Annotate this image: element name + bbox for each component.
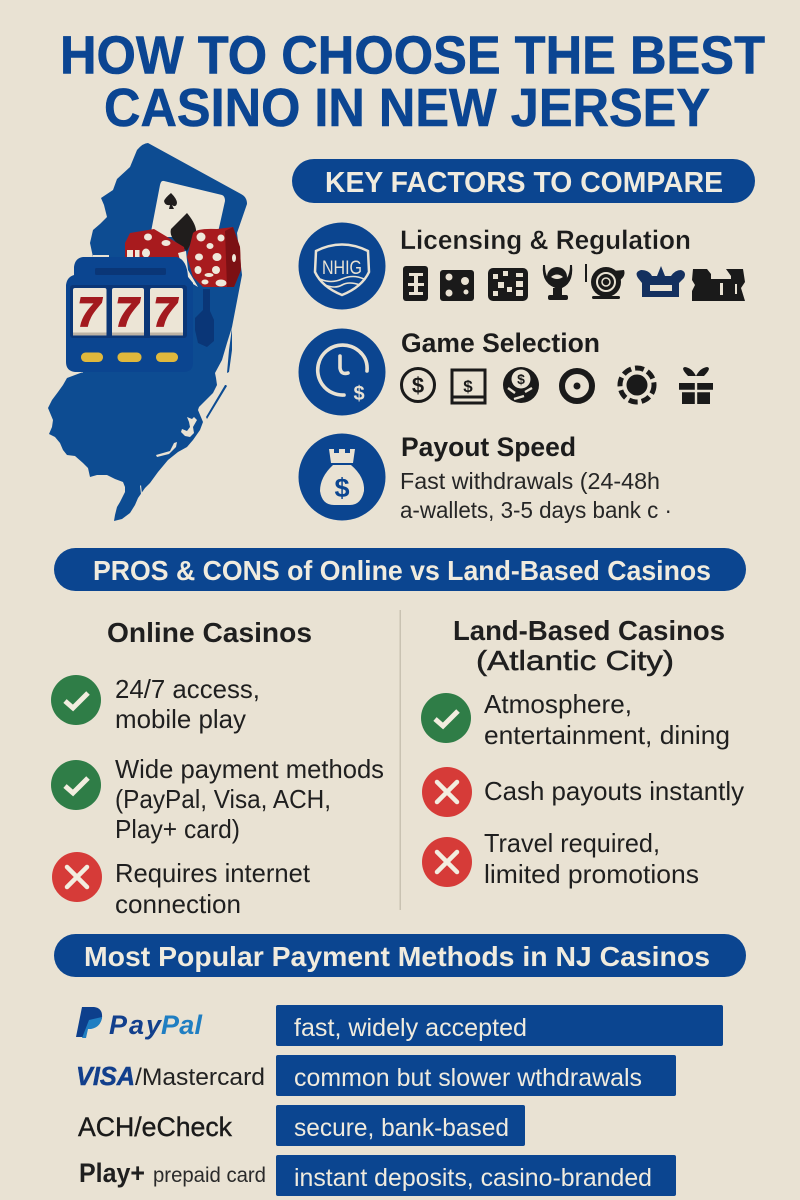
con: cash payouts (422, 767, 744, 817)
panel: online casinos (51, 617, 384, 919)
payment row: Play+ prepaid card: prepaid card (153, 1164, 266, 1187)
map of New Jersey (48, 143, 247, 521)
column heading: Online Casinos (107, 617, 312, 648)
bar (276, 1155, 676, 1196)
red dice (125, 227, 241, 287)
factor: licensing and regulation (298, 222, 745, 310)
payment row: ACH / eCheck: ACH/eCheck (78, 1112, 232, 1142)
heading pill: key factors (292, 159, 755, 203)
reel sevens: 7 (78, 289, 103, 335)
icon: clock with dollar (298, 328, 386, 416)
icon: money bag: $ (334, 473, 350, 503)
title (60, 26, 765, 138)
heading pill: pros and cons (54, 548, 746, 591)
logo: PayPal: Pay (109, 1010, 163, 1040)
con: internet (52, 852, 311, 919)
column heading (453, 615, 725, 676)
description: a-wallets, 3-5 days bank c · (400, 497, 672, 523)
con: travel (422, 828, 699, 889)
payment row: Visa / Mastercard: VISA (76, 1061, 135, 1091)
icon row: game symbols (402, 367, 713, 404)
description (400, 468, 672, 523)
illustration: New Jersey map with casino items (48, 143, 247, 521)
pro: access: mobile play (115, 704, 246, 734)
column heading: Land-Based Casinos (453, 615, 725, 646)
payment row: Play+ prepaid card: Play+ (79, 1158, 145, 1188)
heading pill: pros and cons: PROS & CONS of Online vs Land-Based Casinos (93, 555, 711, 586)
heading pill: key factors: KEY FACTORS TO COMPARE (325, 167, 723, 199)
con: cash payouts: Cash payouts instantly (484, 776, 744, 806)
payment row: Play+ prepaid card: instant deposits, casino-branded (294, 1164, 652, 1192)
factor: payout speed (298, 432, 672, 523)
column heading: (Atlantic City) (476, 645, 674, 676)
payment row: Visa / Mastercard (76, 1055, 676, 1096)
description: Fast withdrawals (24-48h (400, 468, 660, 494)
icon: clock with dollar: $ (353, 383, 365, 405)
icon row: game symbols: $ (517, 371, 525, 387)
con: internet: connection (115, 889, 241, 919)
heading pill: payment methods: Most Popular Payment Methods in NJ Casinos (84, 941, 710, 972)
pro: payment methods (51, 754, 384, 844)
pro: access (51, 674, 260, 734)
reel sevens: 7 (116, 289, 141, 335)
playing card (150, 181, 225, 251)
pro: access: 24/7 access, (115, 674, 260, 704)
payment row: ACH / eCheck (78, 1105, 525, 1146)
payment row: PayPal: fast, widely accepted (294, 1014, 527, 1042)
reel sevens (78, 289, 179, 335)
reel sevens: 7 (154, 289, 179, 335)
pro: payment methods: (PayPal, Visa, ACH, (115, 784, 331, 814)
icon row: game symbols: $ (463, 377, 473, 396)
heading: Licensing & Regulation (400, 225, 691, 255)
heading: Payout Speed (401, 432, 576, 462)
con: internet: Requires internet (115, 858, 311, 888)
pro: atmosphere: entertainment, dining (484, 720, 730, 750)
payment row: Play+ prepaid card (79, 1155, 676, 1196)
factor: game selection (298, 328, 713, 416)
heading pill: payment methods (54, 934, 746, 977)
title: CASINO IN NEW JERSEY (104, 78, 710, 138)
bar (276, 1055, 676, 1096)
bar (276, 1105, 525, 1146)
pro: payment methods: Wide payment methods (115, 754, 384, 784)
coastal inlets (63, 255, 197, 494)
pro: atmosphere: Atmosphere, (484, 689, 632, 719)
title: HOW TO CHOOSE THE BEST (60, 26, 765, 86)
icon row: game symbols: $ (412, 373, 424, 398)
icon: licence badge: NHIG (322, 258, 362, 279)
icon: money bag (298, 434, 386, 520)
pro: atmosphere (421, 689, 730, 750)
panel: land-based casinos (421, 615, 744, 889)
logo: PayPal: Pal (161, 1010, 202, 1040)
payment row: ACH / eCheck: secure, bank-based (294, 1114, 509, 1142)
payment row: Visa / Mastercard: /Mastercard (135, 1064, 265, 1091)
logo: PayPal (76, 1007, 202, 1040)
payment row: Visa / Mastercard: common but slower wthdrawals (294, 1064, 642, 1092)
heading: Game Selection (401, 328, 600, 358)
icon row: casino licensing symbols (403, 264, 745, 301)
pro: payment methods: Play+ card) (115, 814, 240, 844)
con: travel: Travel required, (484, 828, 660, 858)
bar (276, 1005, 723, 1046)
con: travel: limited promotions (484, 859, 699, 889)
slot machine (66, 257, 214, 372)
payment row: PayPal (76, 1005, 723, 1046)
icon: licence badge (298, 222, 386, 310)
